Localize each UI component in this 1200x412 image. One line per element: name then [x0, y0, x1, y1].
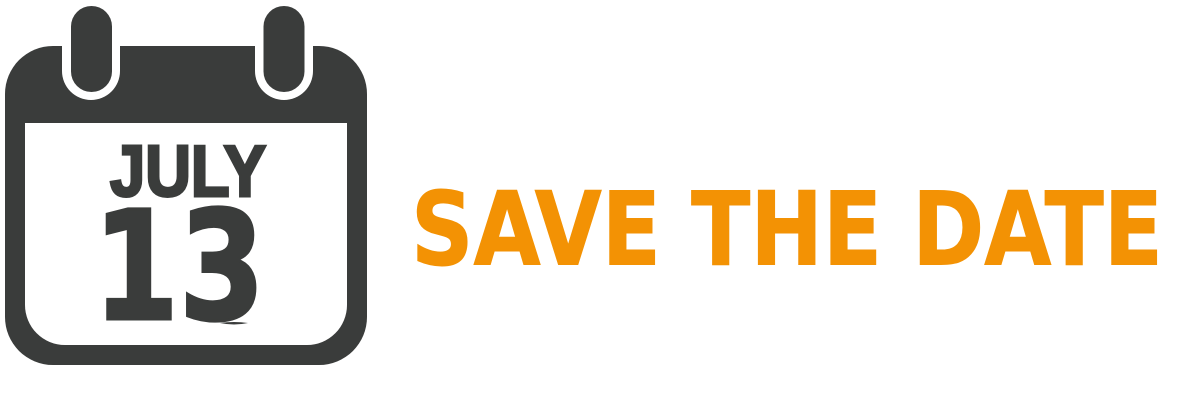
right ring [255, 6, 313, 100]
day number: 13 [93, 179, 265, 355]
icon: calendar [5, 6, 367, 365]
left ring [62, 6, 120, 100]
calendar page [25, 123, 347, 345]
digit sliver [220, 322, 248, 324]
month label: JULY [110, 132, 266, 212]
calendar body [5, 46, 367, 365]
